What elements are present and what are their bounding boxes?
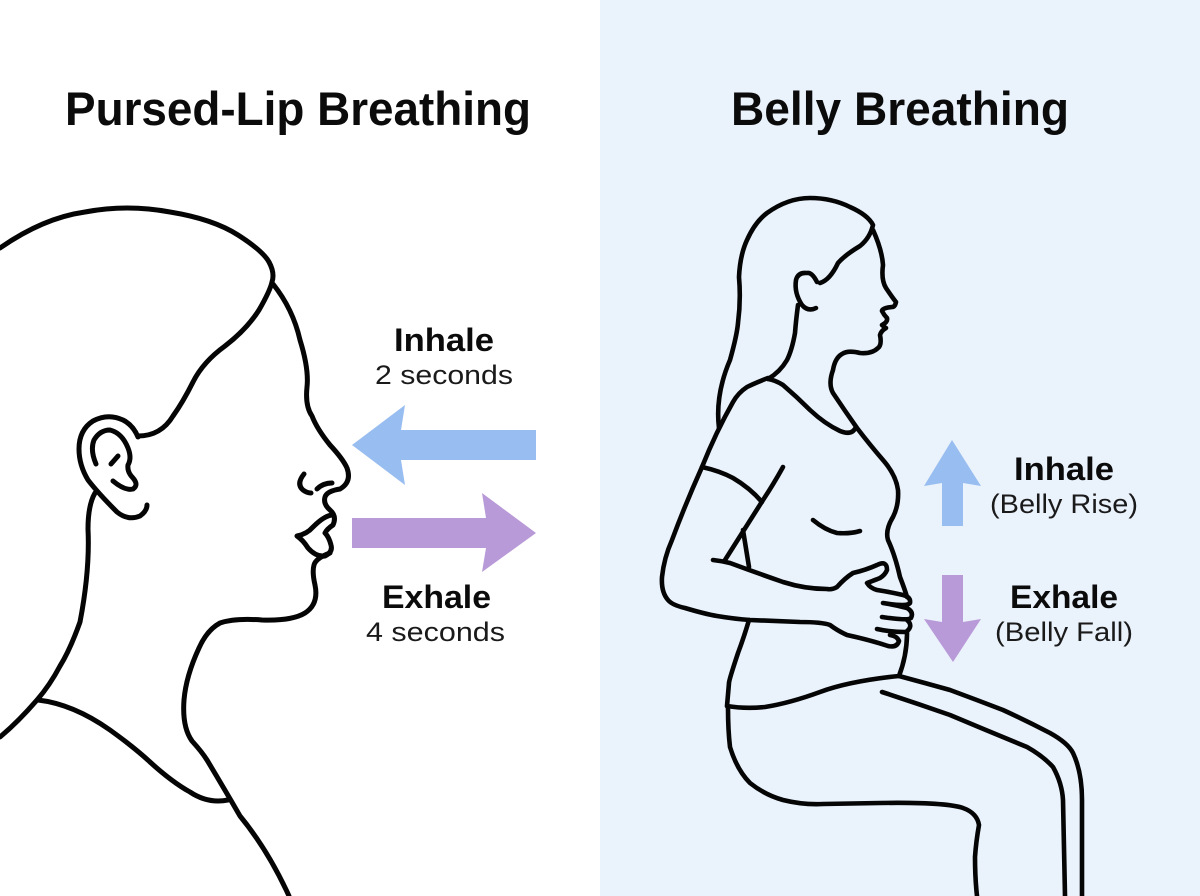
label: inhale 2 seconds: 2 seconds xyxy=(375,360,513,390)
hair xyxy=(718,198,873,428)
arrow: inhale, pointing up xyxy=(924,440,981,526)
illustration: head profile with pursed lips xyxy=(0,208,348,896)
shirt collar xyxy=(768,379,856,433)
shoulder line xyxy=(38,700,228,801)
label: inhale 2 seconds xyxy=(375,322,513,390)
label: exhale 4 seconds xyxy=(366,579,505,647)
seat and back of legs xyxy=(728,708,979,896)
ear xyxy=(796,273,817,309)
label: exhale belly fall: Exhale xyxy=(1010,579,1118,615)
label: exhale 4 seconds: Exhale xyxy=(382,579,491,615)
back of neck xyxy=(768,305,798,379)
nostril xyxy=(300,474,332,493)
arrow: inhale, pointing left xyxy=(352,405,536,485)
sleeve and inner arm xyxy=(702,467,783,567)
face profile and lips xyxy=(273,284,348,556)
label: inhale belly rise: (Belly Rise) xyxy=(990,489,1138,519)
arrow: exhale, pointing down xyxy=(924,575,981,662)
hand on belly xyxy=(713,560,912,632)
label: exhale 4 seconds: 4 seconds xyxy=(366,617,505,647)
label: inhale belly rise xyxy=(990,451,1138,519)
shoulder and arm outline xyxy=(662,378,899,646)
icon: ear xyxy=(79,417,147,518)
panel: belly breathing xyxy=(662,82,1138,896)
label: inhale belly rise: Inhale xyxy=(1014,451,1114,487)
belly and shirt hem xyxy=(727,620,907,708)
panel: pursed-lip breathing xyxy=(0,82,536,896)
face and chest profile xyxy=(830,230,907,597)
heading: pursed-lip breathing: Pursed-Lip Breathing xyxy=(65,82,531,135)
hair and head outline xyxy=(0,208,273,436)
label: exhale belly fall: (Belly Fall) xyxy=(995,617,1133,647)
illustration: seated woman with hand on belly xyxy=(662,198,1082,896)
chin, jaw and front of neck xyxy=(184,553,330,896)
heading: belly breathing: Belly Breathing xyxy=(731,82,1069,135)
thigh and shin lines xyxy=(882,676,1082,896)
belly crease xyxy=(813,520,860,533)
label: inhale 2 seconds: Inhale xyxy=(394,322,494,358)
back of neck xyxy=(0,493,95,737)
label: exhale belly fall xyxy=(995,579,1133,647)
arrow: exhale, pointing right xyxy=(352,493,536,572)
